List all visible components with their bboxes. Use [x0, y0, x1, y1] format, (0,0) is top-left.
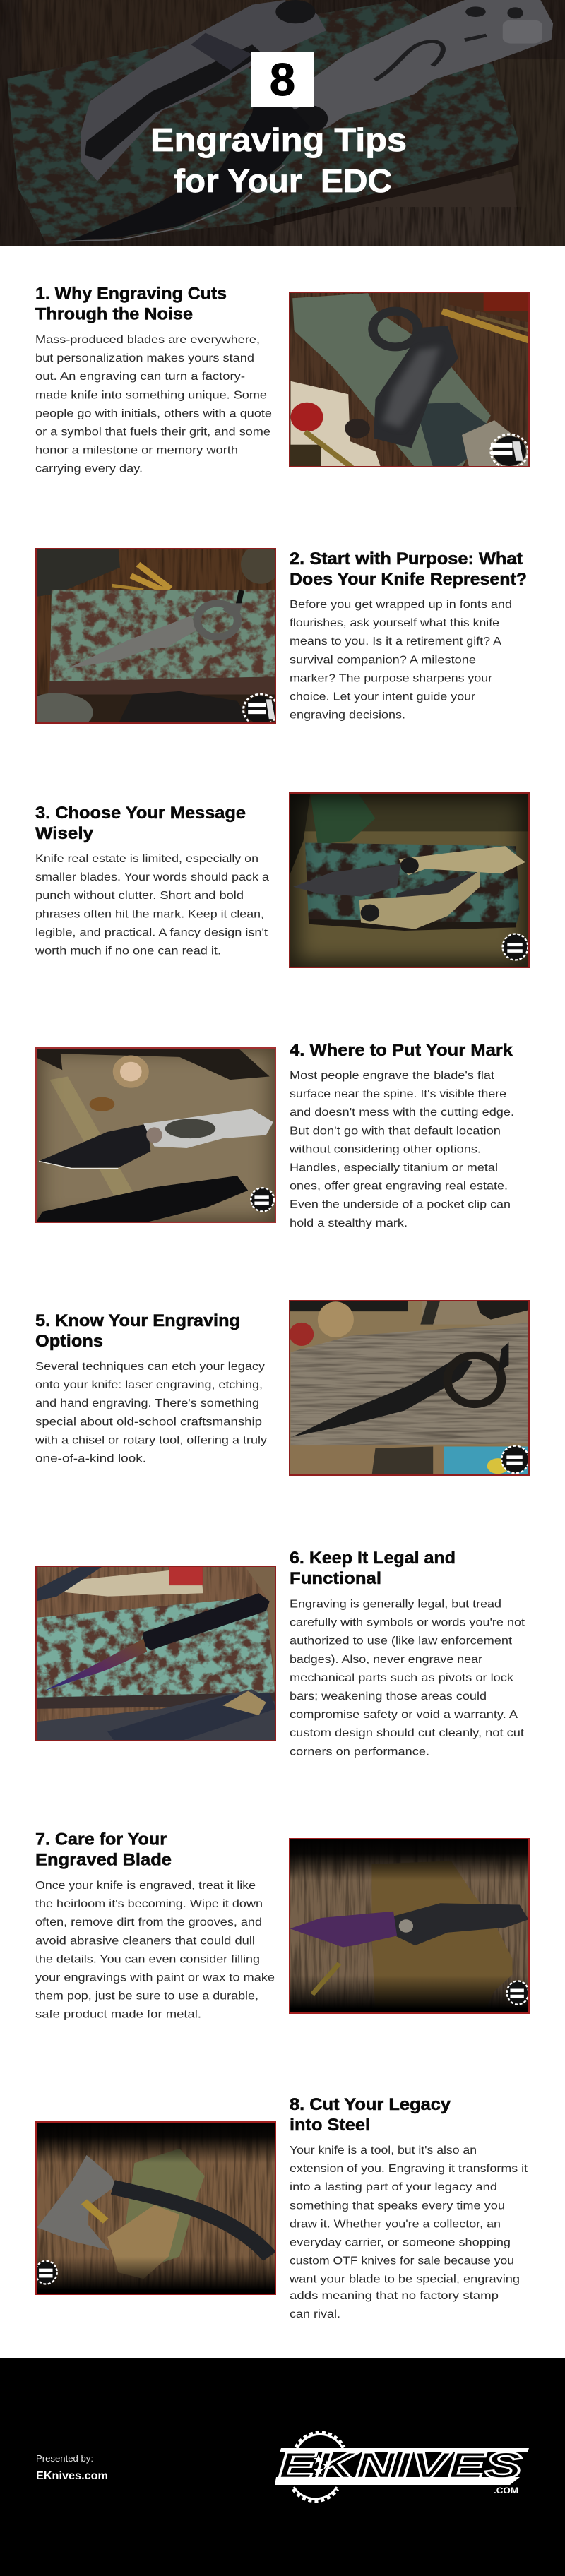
heading [35, 1830, 172, 1870]
body text [289, 1070, 514, 1229]
body text: and doesn't mess with the cutting edge. [290, 1107, 514, 1119]
title: for Your EDC [174, 162, 392, 199]
body text [35, 1361, 267, 1465]
body text: flourishes, ask yourself what this knife [290, 617, 499, 629]
body text: But don't go with that default location [290, 1125, 501, 1137]
body text [35, 1880, 275, 2021]
body text: the details. You can even consider filling [35, 1953, 260, 1965]
body text: them pop, just be sure to use a durable, [35, 1991, 258, 2003]
hero photo: two engraved folding knives on a rusted tin [0, 0, 565, 246]
icon: watermark [501, 1446, 529, 1473]
body text: people go with initials, others with a quote [35, 407, 272, 419]
footer [0, 2358, 565, 2576]
panel: tip 4 [25, 1037, 514, 1233]
body text: or a symbol that fuels their grit, and some [35, 427, 270, 438]
heading: 7. Care for Your [35, 1830, 167, 1849]
body text: adds meaning that no factory stamp [290, 2290, 499, 2302]
heading: 3. Choose Your Message [35, 804, 246, 823]
panel: tip 8 [35, 2095, 528, 2320]
title [150, 121, 407, 199]
image: damascus hatchet on wooden crate [35, 2121, 276, 2295]
number badge [251, 52, 314, 107]
body text: made knife into something unique. Some [35, 389, 267, 401]
heading: 8. Cut Your Legacy [290, 2095, 451, 2114]
body text: Knife real estate is limited, especially on [35, 853, 258, 865]
heading: Through the Noise [35, 305, 193, 324]
image: engraved ring knife on green case [289, 292, 530, 468]
icon: watermark [491, 434, 528, 468]
image: black knife on weathered plank [289, 1300, 530, 1476]
body text: Engraving is generally legal, but tread [290, 1599, 501, 1610]
heading: 2. Start with Purpose: What [290, 549, 523, 568]
panel: tip 1 [35, 285, 530, 475]
body text: Once your knife is engraved, treat it like [35, 1880, 256, 1892]
presenter text: EKnives.com [36, 2470, 108, 2482]
body text: avoid abrasive cleaners that could dull [35, 1935, 255, 1947]
body text [290, 599, 512, 722]
heading [290, 549, 527, 589]
body text: badges). Also, never engrave near [290, 1654, 483, 1666]
body text: draw it. Whether you're a collector, an [290, 2218, 501, 2230]
body text: bars; weakening those areas could [290, 1690, 487, 1703]
icon: watermark [244, 694, 278, 725]
body text: Handles, especially titanium or metal [290, 1162, 498, 1174]
body text: something that speaks every time you [290, 2200, 505, 2212]
panel: tip 6 [35, 1549, 525, 1758]
logo: EKnives: EKNIVES [278, 2445, 522, 2486]
body text: smaller blades. Your words should pack a [35, 871, 269, 883]
body text: punch without clutter. Short and bold [35, 890, 244, 902]
body text: phrases often hit the mark. Keep it clean, [35, 908, 264, 920]
presenter text [36, 2454, 108, 2482]
body text: worth much if no one can read it. [35, 945, 221, 958]
body text: honor a milestone or memory worth [35, 445, 238, 457]
heading: 1. Why Engraving Cuts [35, 285, 227, 304]
body text: ones, offer great engraving real estate. [290, 1181, 508, 1193]
heading: 4. Where to Put Your Mark [290, 1041, 513, 1060]
heading [35, 804, 246, 843]
heading [290, 1549, 456, 1588]
hero banner [0, 0, 565, 246]
body text: your engravings with paint or wax to make [35, 1972, 275, 1984]
body text: safe product made for metal. [35, 2009, 201, 2021]
body text [35, 853, 269, 958]
body text: Several techniques can etch your legacy [35, 1361, 265, 1373]
body text: Your knife is a tool, but it's also an [290, 2145, 477, 2157]
body text: Mass-produced blades are everywhere, [35, 334, 260, 346]
body text: compromise safety or void a warranty. A [290, 1709, 518, 1721]
body text: without considering other options. [289, 1143, 481, 1155]
body text: special about old-school craftsmanship [35, 1416, 262, 1428]
body text: often, remove dirt from the grooves, and [35, 1916, 262, 1928]
panel: tip 5 [35, 1300, 530, 1476]
body text: everyday carrier, or someone shopping [290, 2237, 511, 2248]
heading: Wisely [35, 824, 94, 843]
heading [290, 2095, 451, 2135]
heading [35, 1311, 240, 1351]
image: purple damascus folding knife on glove [289, 1838, 530, 2014]
body text: and hand engraving. There's something [35, 1397, 259, 1409]
body text: custom design should cut cleanly, not cut [290, 1727, 525, 1739]
icon: watermark [251, 1188, 274, 1211]
body text: mechanical parts such as pivots or lock [290, 1672, 514, 1684]
panel: tip 3 [35, 782, 540, 978]
image: slim knife on green rusted tin [21, 544, 280, 732]
body text: hold a stealthy mark. [290, 1217, 408, 1229]
body text: Even the underside of a pocket clip can [290, 1199, 511, 1211]
presenter text: Presented by: [36, 2454, 93, 2464]
body text: but personalization makes yours stand [35, 352, 254, 364]
heading: 5. Know Your Engraving [35, 1311, 240, 1330]
logo: EKnives: .COM [494, 2486, 518, 2496]
heading: Does Your Knife Represent? [290, 570, 527, 589]
icon: watermark [35, 2261, 57, 2284]
body text [289, 2145, 528, 2320]
body text [290, 1599, 525, 1758]
body text: into a lasting part of your legacy and [290, 2181, 497, 2193]
body text: want your blade to be special, engraving [289, 2274, 520, 2286]
heading [35, 285, 227, 324]
image: OTF knife on green tin [35, 1566, 276, 1741]
body text: one-of-a-kind look. [35, 1453, 146, 1465]
body text: carefully with symbols or words you're not [290, 1617, 525, 1629]
number badge: 8 [270, 54, 295, 105]
heading: Engraved Blade [35, 1851, 172, 1870]
body text: means to you. Is it a retirement gift? A [290, 636, 501, 648]
icon: watermark [503, 934, 528, 960]
heading: Options [35, 1332, 103, 1351]
body text: marker? The purpose sharpens your [290, 672, 493, 684]
body text: survival companion? A milestone [290, 654, 476, 666]
image: black blade knife with silver engraved handle [25, 1037, 287, 1233]
body text: legible, and practical. A fancy design isn't [35, 926, 268, 938]
body text: Most people engrave the blade's flat [290, 1070, 495, 1082]
body text: can rival. [290, 2308, 340, 2320]
body text [35, 334, 272, 475]
body text: out. An engraving can turn a factory- [35, 371, 245, 383]
body text: with a chisel or rotary tool, offering a truly [35, 1434, 267, 1446]
logo: EKnives [275, 2433, 529, 2501]
icon: watermark [507, 1981, 528, 2005]
body text: Before you get wrapped up in fonts and [290, 599, 512, 611]
image: two damascus knives with tan handles [278, 782, 540, 978]
body text: engraving decisions. [290, 710, 405, 722]
heading: 6. Keep It Legal and [290, 1549, 456, 1568]
title: Engraving Tips [150, 121, 407, 158]
body text: carrying every day. [35, 463, 143, 475]
body text: choice. Let your intent guide your [290, 691, 476, 703]
body text: surface near the spine. It's visible there [290, 1088, 506, 1100]
body text: authorized to use (like law enforcement [290, 1635, 513, 1647]
body text: custom OTF knives for sale because you [290, 2255, 514, 2267]
body text: extension of you. Engraving it transforms it [290, 2163, 528, 2175]
heading: Functional [290, 1569, 381, 1588]
panel: tip 7 [35, 1830, 530, 2021]
body text: corners on performance. [290, 1746, 429, 1758]
heading: into Steel [290, 2116, 370, 2135]
body text: onto your knife: laser engraving, etching, [35, 1379, 263, 1391]
body text: the heirloom it's becoming. Wipe it down [35, 1898, 263, 1910]
panel: tip 2 [21, 544, 527, 732]
